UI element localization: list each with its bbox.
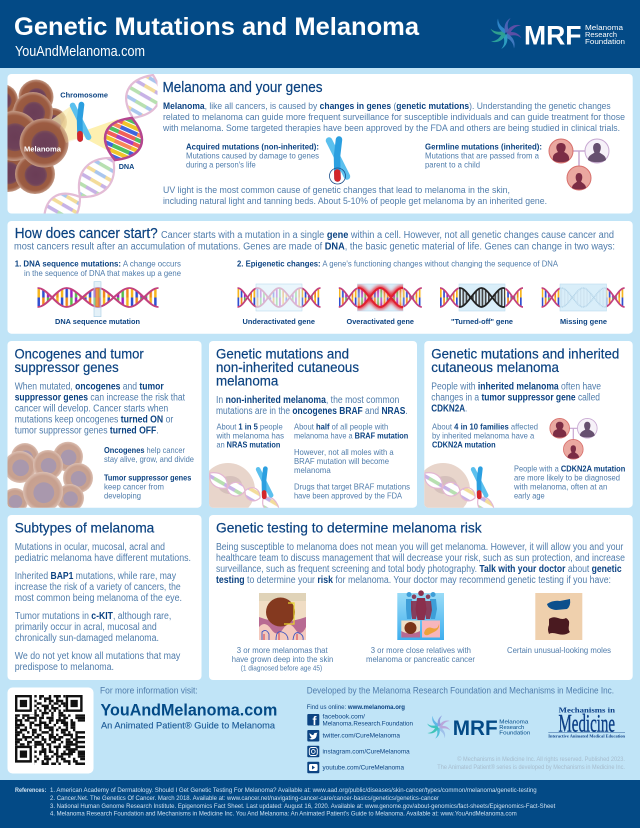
icon: youtube (307, 762, 319, 773)
heading: Genetic mutations and (216, 345, 349, 361)
panel: inherited cutaneous melanoma (416, 341, 633, 517)
oncogenes description (104, 445, 194, 464)
youtube link: youtube.com/CureMelanoma (322, 764, 404, 771)
intro text: most cancers result after an accumulation of mutations. Genes are made of DNA, the basic genetic material of life. Genes can change in two ways: (14, 242, 615, 252)
image: unusual moles (535, 593, 582, 640)
paragraph: c-KIT: Tumor mutations in c-KIT, although rare, (15, 611, 171, 622)
NRAS statistic (216, 421, 284, 449)
body text: suppressor genes can increase the risk that (15, 393, 185, 404)
caption: deep melanoma: (1 diagnosed before age 45) (241, 664, 322, 673)
DNA sequence mutations text: in the sequence of DNA that makes up a gene (24, 268, 181, 278)
NRAS statistic: with melanoma has (216, 430, 284, 440)
illustration: cell, DNA and chromosome (424, 463, 494, 508)
logo: Melanoma Research Foundation: Research (499, 725, 524, 731)
overactivated gene diagram (339, 284, 422, 326)
body text (431, 382, 601, 415)
BRAF statistic: About half of all people with (294, 421, 389, 431)
paragraph: c-KIT: chronically sun-damaged melanoma. (15, 633, 159, 644)
body text: mutations are in the oncogenes BRAF and NRAS. (216, 406, 408, 417)
family statistic (432, 421, 538, 449)
social links: Find us online: www.melanoma.org (307, 704, 405, 711)
caption: deep melanoma: 3 or more melanomas that (237, 645, 328, 655)
turned-off gene diagram (440, 284, 523, 326)
caption: family history: 3 or more close relatives with (371, 645, 471, 655)
logo: MRF: Melanoma (585, 25, 623, 32)
logo: MRF: Research (585, 32, 617, 39)
family statistic: by inherited melanoma have a (432, 430, 535, 440)
family statistic: About 4 in 10 families affected (432, 421, 538, 431)
heading: Melanoma and your genes (162, 79, 322, 96)
body text: mutations keep oncogenes turned ON or (15, 415, 174, 426)
drugs note: have been approved by the FDA (294, 491, 402, 501)
body text: CDKN2A. (431, 404, 467, 415)
body text (15, 382, 185, 437)
logo: Melanoma Research Foundation (427, 715, 530, 740)
panel: genetic testing (209, 515, 633, 680)
instagram link: instagram.com/CureMelanoma (322, 748, 410, 755)
body text: When mutated, oncogenes and tumor (15, 382, 164, 393)
UV light text: UV light is the most common cause of genetic changes that lead to melanoma in the skin, (163, 185, 510, 196)
more information block: For more information visit: (100, 685, 198, 696)
DNA sequence mutation diagram (38, 282, 159, 326)
drugs note: Drugs that target BRAF mutations (294, 482, 410, 492)
social links (307, 704, 413, 773)
paragraph: unknown mutations (15, 651, 180, 673)
logo: Mechanisms in Medicine: Interactive Animated Medical Education (548, 734, 625, 739)
references footer (0, 780, 640, 828)
moles note: BRAF mutation will become (294, 456, 389, 466)
body text: In non-inherited melanoma, the most common (216, 395, 399, 406)
caption: deep melanoma (232, 645, 334, 673)
drugs note (294, 482, 410, 501)
missing gene diagram (542, 284, 625, 326)
DNA sequence mutations text (15, 259, 181, 278)
paragraph: BAP1: increase the risk of a variety of cancers, the (15, 582, 181, 593)
logo: Mechanisms in Medicine: Mechanisms in (559, 705, 616, 714)
body text: changes in a tumor suppressor gene called (431, 393, 600, 404)
paragraph: BAP1: most common being melanoma of the eye. (15, 593, 182, 604)
intro text: Cancer starts with a mutation in a single gene within a cell. However, not all genetic changes cause cancer and (161, 230, 614, 241)
paragraph: unknown mutations: We do not yet know all mutations that may (15, 651, 180, 662)
intro text (162, 101, 625, 134)
icon: instagram (307, 746, 319, 757)
oncogenes description: Oncogenes help cancer (104, 445, 185, 455)
caption: unusual moles: Certain unusual-looking moles (507, 645, 611, 655)
references footer: 4. Melanoma Research Foundation and Mechanisms in Medicine Inc. You And Melanoma: An Animated Patient's Guide to Melanoma. Available at: www.YouAndMelanoma.com (50, 811, 517, 818)
DNA sequence mutations text: 1. DNA sequence mutations: A change occurs (15, 259, 181, 269)
paragraph: c-KIT (15, 611, 171, 644)
caption: deep melanoma: have grown deep into the skin (232, 654, 334, 664)
body text: cancer will develop. Cancer starts when (15, 404, 168, 415)
heading (216, 345, 359, 389)
logo: Melanoma Research Foundation: Melanoma (499, 720, 529, 726)
germline mutations text: Mutations that are passed from a (425, 150, 539, 160)
label: DNA sequence mutation (55, 317, 140, 326)
body text: testing to determine your risk for melanoma. Your doctor may recommend genetic testing if you have: (216, 575, 611, 586)
CDKN2A note: with melanoma, often at an (513, 482, 608, 492)
acquired mutations text (186, 142, 319, 170)
NRAS statistic: an NRAS mutation (216, 439, 280, 449)
references footer: 2. Cancer.Net. The Genetics Of Cancer. March 2018. Available at: www.cancer.net/navigating-cancer-care/cancer-basics/genetics/genetics-cancer (50, 795, 439, 802)
paragraph: unknown mutations: predispose to melanoma. (15, 662, 114, 673)
germline mutations text (425, 142, 542, 170)
paragraph: mutation types (15, 542, 191, 564)
illustration: cells (8, 442, 93, 508)
panel: melanoma and your genes (0, 74, 633, 225)
heading: Oncogenes and tumor (14, 345, 144, 361)
BRAF statistic: melanoma have a BRAF mutation (294, 430, 408, 440)
heading: melanoma (216, 373, 278, 389)
heading: cutaneous melanoma (431, 359, 559, 375)
BRAF statistic (294, 421, 408, 440)
caption: family history: melanoma or pancreatic cancer (366, 654, 475, 664)
intro text (14, 230, 615, 252)
tumor suppressor description: Tumor suppressor genes (104, 473, 192, 483)
caption: family history (366, 645, 475, 664)
facebook link: facebook.com/ (322, 714, 365, 721)
CDKN2A note (513, 464, 625, 501)
magnified DNA (105, 118, 142, 160)
copyright notice (437, 755, 625, 771)
heading: How does cancer start? (15, 226, 158, 242)
heading (431, 345, 619, 375)
epigenetic changes text: 2. Epigenetic changes: A gene's functioning changes without changing the sequence of DNA (237, 259, 558, 269)
logo: Melanoma Research Foundation: MRF (453, 717, 498, 740)
more information block (100, 685, 277, 732)
paragraph: BAP1 (15, 571, 182, 604)
facebook link: Melanoma.Research.Foundation (322, 720, 413, 727)
website subtitle: YouAndMelanoma.com (15, 44, 145, 60)
QR code card (8, 688, 94, 774)
label: chromosome: Chromosome (60, 90, 108, 99)
body text: tumor suppressor genes turned OFF. (15, 426, 159, 437)
acquired mutations text: during a person's life (186, 160, 256, 170)
icon: chromosome (73, 105, 88, 139)
title: Genetic Mutations and Melanoma (14, 13, 420, 41)
tumor suppressor description (104, 473, 192, 501)
illustration: melanoma cells, chromosome and DNA (8, 74, 158, 214)
heading (14, 345, 144, 375)
twitter link: twitter.com/CureMelanoma (322, 733, 400, 740)
CDKN2A note: People with a CDKN2A mutation (514, 464, 625, 474)
label: Missing gene (560, 317, 607, 326)
label: "Turned-off" gene (451, 317, 513, 326)
family statistic: CDKN2A mutation (432, 439, 496, 449)
paragraph: c-KIT: primarily occur in acral, mucosal and (15, 622, 157, 633)
logo: Mechanisms in Medicine (548, 705, 625, 739)
body text: surveillance, such as frequent screening and total body photography. Talk with your doctor about genetic (216, 564, 622, 575)
acquired mutations text: Mutations caused by damage to genes (186, 150, 319, 160)
facebook link (322, 714, 413, 727)
label: Overactivated gene (346, 317, 414, 326)
UV light text: including natural light and tanning beds. About 5-10% of people get melanoma by an inherited gene. (163, 196, 547, 207)
icon: chromosome with damaged tip (329, 140, 347, 184)
heading: Genetic mutations and inherited (431, 345, 619, 361)
CDKN2A note: early age (514, 491, 545, 501)
paragraph: BAP1: Inherited BAP1 mutations, while rare, may (15, 571, 176, 582)
heading: suppressor genes (14, 359, 119, 375)
icon: facebook: f (312, 714, 318, 728)
references footer: References: (15, 787, 46, 794)
heading: Subtypes of melanoma (15, 520, 154, 536)
oncogenes description: stay alive, grow, and divide (104, 454, 194, 464)
intro text: Melanoma, like all cancers, is caused by changes in genes (genetic mutations). Understanding the genetic changes (163, 101, 611, 112)
germline mutations text: parent to a child (425, 160, 480, 170)
guide name: An Animated Patient® Guide to Melanoma (101, 721, 276, 732)
paragraph: mutation types: Mutations in ocular, mucosal, acral and (15, 542, 165, 553)
underactivated gene diagram (238, 284, 320, 326)
logo: MRF (490, 18, 625, 50)
label: DNA: DNA (119, 162, 135, 171)
NRAS statistic: About 1 in 5 people (216, 421, 283, 431)
panel: how does cancer start (8, 221, 633, 334)
logo: MRF: MRF (524, 20, 582, 50)
moles note: However, not all moles with a (294, 447, 394, 457)
image: deep melanoma (259, 593, 306, 640)
body text (216, 395, 408, 417)
UV light text (163, 185, 547, 207)
panel: oncogenes and tumor suppressor genes (2, 341, 202, 514)
acquired mutations text: Acquired mutations (non-inherited): (186, 142, 319, 152)
heading: non-inherited cutaneous (216, 359, 359, 375)
heading: Genetic testing to determine melanoma risk (216, 520, 483, 536)
icon: family tree (550, 418, 597, 459)
image: family history (397, 590, 444, 640)
germline mutations text: Germline mutations (inherited): (425, 142, 542, 152)
label: melanoma: Melanoma (24, 145, 62, 154)
label: Underactivated gene (242, 317, 315, 326)
moles note (294, 447, 394, 475)
logo: Melanoma Research Foundation: Foundation (499, 730, 530, 736)
website name: YouAndMelanoma.com (100, 701, 277, 720)
logo: MRF: Foundation (585, 39, 625, 46)
tumor suppressor description: keep cancer from (104, 482, 164, 492)
icon: twitter (307, 730, 319, 742)
panel: subtypes of melanoma (8, 515, 202, 680)
tumor suppressor description: developing (104, 491, 141, 501)
paragraph: mutation types: pediatric melanoma have different mutations. (15, 553, 191, 564)
icon: family tree (549, 139, 609, 190)
illustration: cell, DNA and chromosome (209, 463, 280, 508)
references footer: 1. American Academy of Dermatology. Should I Get Genetic Testing For Melanoma? Available at: www.aad.org/public/diseases/skin-cancer/types/common/melanoma/genetic-testing (50, 787, 537, 794)
references footer: 3. National Human Genome Research Institute. Epigenomics Fact Sheet. Last updated: August 16, 2020. Available at: www.genome.gov/about-genomics/fact-sheets/Epigenomics-Fact-Sheet (50, 803, 556, 810)
body text: People with inherited melanoma often have (431, 382, 601, 393)
header banner (0, 0, 640, 68)
CDKN2A note: are more likely to be diagnosed (514, 473, 620, 483)
moles note: melanoma (294, 465, 331, 475)
panel: non-inherited cutaneous melanoma (201, 341, 417, 517)
body text (216, 542, 625, 586)
